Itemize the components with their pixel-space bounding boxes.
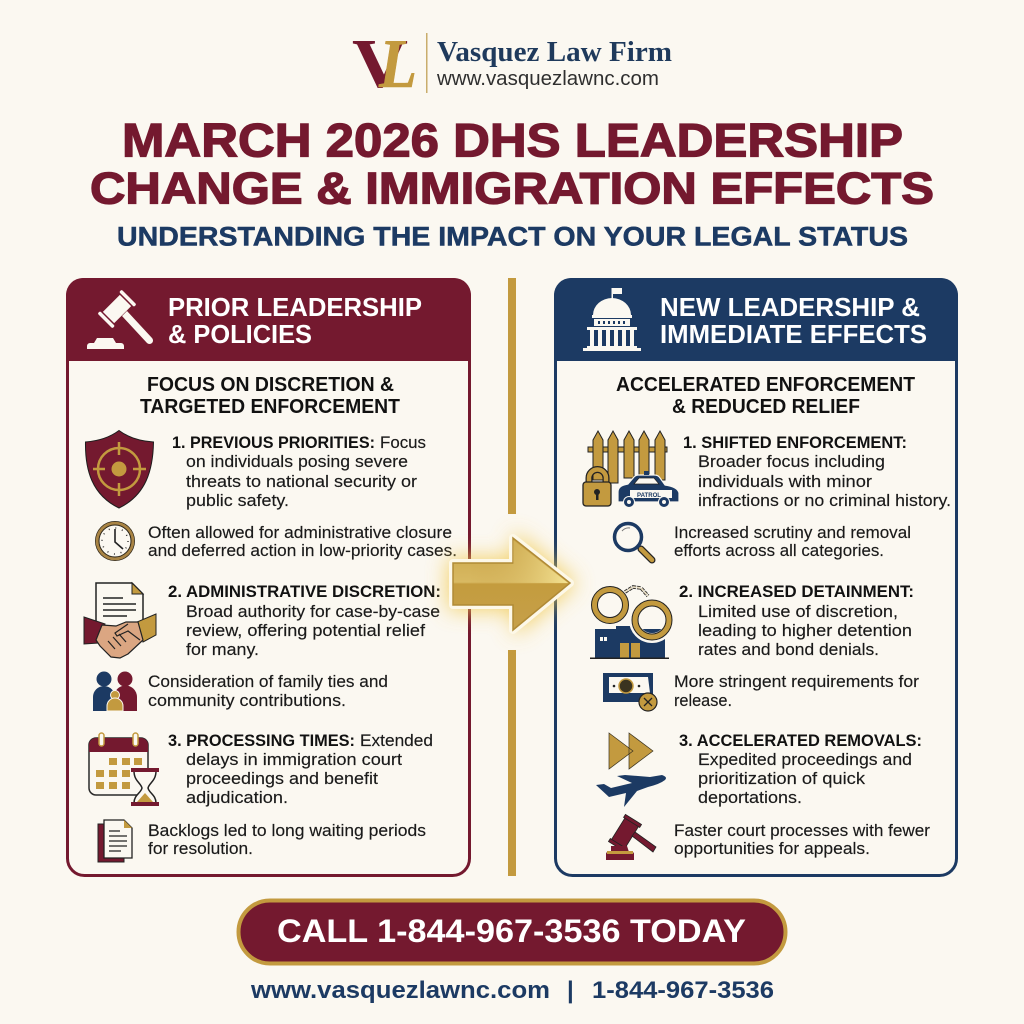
- text: shifted enforcement: Broader focus including: [698, 452, 885, 471]
- text: processing times: Extended: [360, 731, 433, 750]
- text: appeals note: Faster court processes with fewer: [674, 821, 930, 840]
- icon: VL monogram: V: [352, 26, 408, 103]
- text: administrative discretion: Broad authority for case-by-case: [186, 602, 440, 621]
- text: increased detainment: 2. INCREASED DETAINMENT:: [679, 582, 914, 601]
- text: accelerated removals: Expedited proceedings and: [698, 750, 912, 769]
- text: processing times: proceedings and benefit: [186, 769, 378, 788]
- text: scrutiny note: [674, 523, 911, 560]
- firm name: Vasquez Law Firm: [437, 37, 672, 68]
- panel heading: FOCUS ON DISCRETION &: [147, 374, 394, 396]
- header text: IMMEDIATE EFFECTS: [660, 319, 927, 349]
- header text: & POLICIES: [168, 319, 312, 349]
- text: release note: More stringent requirements for: [674, 672, 919, 691]
- panel: prior leadership and policies: [66, 278, 471, 876]
- arrow: gold arrow from prior to new leadership: [448, 531, 577, 637]
- center divider: [508, 278, 516, 876]
- footer contact line: www.vasquezlawnc.com: [250, 977, 550, 1004]
- panel header: prior leadership: [66, 278, 471, 361]
- text: previous priorities: [172, 433, 426, 510]
- text: scrutiny note: efforts across all categories.: [674, 541, 884, 560]
- text: family ties note: community contributions.: [148, 691, 346, 710]
- text: release note: [674, 672, 919, 710]
- icon: document and handshake: [84, 583, 156, 658]
- icon: fence, lock and patrol car: PATROL: [637, 493, 661, 499]
- text: increased detainment: [679, 582, 914, 659]
- call to action button: [238, 900, 786, 964]
- text: increased detainment: leading to higher detention: [698, 621, 912, 640]
- title: CHANGE & IMMIGRATION EFFECTS: [90, 164, 934, 214]
- subtitle: UNDERSTANDING THE IMPACT ON YOUR LEGAL STATUS: [117, 222, 908, 252]
- text: administrative closure note: and deferred action in low-priority cases.: [148, 541, 457, 560]
- text: administrative closure note: Often allowed for administrative closure: [148, 523, 452, 542]
- header text: [660, 292, 927, 349]
- icon: family: [93, 672, 137, 711]
- footer contact line: [250, 977, 774, 1004]
- icon: white gavel: [87, 290, 153, 349]
- text: processing times: adjudication.: [186, 788, 288, 807]
- icon: shield with target: [85, 430, 154, 508]
- text: processing times: 3. PROCESSING TIMES:: [168, 731, 355, 750]
- icon: white capitol building: [583, 288, 641, 351]
- text: release note: release.: [674, 691, 732, 710]
- icon: documents: [98, 820, 132, 862]
- icon: calendar and hourglass: [89, 733, 159, 806]
- icon: fast-forward and airplane: [596, 733, 666, 807]
- text: increased detainment: Limited use of discretion,: [698, 602, 898, 621]
- text: backlogs note: Backlogs led to long waiting periods: [148, 821, 426, 840]
- text: processing times: delays in immigration court: [186, 750, 402, 769]
- logo: Vasquez Law Firm: [352, 26, 672, 103]
- icon: handcuffs and detention building: [590, 587, 670, 659]
- text: previous priorities: Focus: [380, 433, 426, 452]
- text: shifted enforcement: [683, 433, 951, 510]
- text: appeals note: [674, 821, 930, 858]
- header text: [168, 292, 422, 349]
- text: appeals note: opportunities for appeals.: [674, 839, 870, 858]
- footer contact line: 1-844-967-3536: [592, 977, 774, 1004]
- panel heading: TARGETED ENFORCEMENT: [140, 396, 400, 418]
- header text: NEW LEADERSHIP &: [660, 292, 920, 322]
- panel: new leadership and immediate effects: [554, 278, 958, 876]
- text: shifted enforcement: 1. SHIFTED ENFORCEMENT:: [683, 433, 907, 452]
- panel heading: & REDUCED RELIEF: [672, 396, 860, 418]
- text: accelerated removals: [679, 731, 922, 807]
- text: increased detainment: rates and bond denials.: [698, 640, 879, 659]
- text: accelerated removals: 3. ACCELERATED REMOVALS:: [679, 731, 922, 750]
- title: [90, 114, 934, 214]
- icon: maroon gavel: [606, 814, 656, 860]
- text: backlogs note: for resolution.: [148, 839, 253, 858]
- firm website: www.vasquezlawnc.com: [436, 68, 659, 90]
- text: previous priorities: on individuals posing severe: [186, 452, 408, 471]
- footer contact line: |: [567, 977, 574, 1004]
- panel heading: ACCELERATED ENFORCEMENT: [616, 374, 915, 396]
- icon: clock: [95, 521, 135, 561]
- text: administrative discretion: 2. ADMINISTRATIVE DISCRETION:: [168, 582, 441, 601]
- text: administrative discretion: [168, 582, 441, 659]
- text: previous priorities: 1. PREVIOUS PRIORITIES:: [172, 433, 375, 452]
- text: processing times: [168, 731, 433, 807]
- text: accelerated removals: prioritization of quick: [698, 769, 866, 788]
- text: administrative discretion: review, offering potential relief: [186, 621, 425, 640]
- call to action button: CALL 1-844-967-3536 TODAY: [277, 913, 746, 949]
- icon: magnifying glass: [614, 524, 652, 560]
- panel heading: [140, 374, 400, 418]
- panel heading: [616, 374, 915, 418]
- text: administrative discretion: for many.: [186, 640, 259, 659]
- icon: bail money with X: [603, 673, 657, 711]
- icon: VL monogram: L: [378, 26, 417, 103]
- icon: fence, lock and patrol car: [583, 431, 679, 508]
- header text: PRIOR LEADERSHIP: [168, 292, 422, 322]
- text: previous priorities: public safety.: [186, 491, 289, 510]
- text: previous priorities: threats to national security or: [186, 472, 417, 491]
- text: scrutiny note: Increased scrutiny and removal: [674, 523, 911, 542]
- text: accelerated removals: deportations.: [698, 788, 802, 807]
- text: shifted enforcement: individuals with minor: [698, 472, 872, 491]
- text: family ties note: Consideration of family ties and: [148, 672, 388, 691]
- panel header: new leadership: [554, 278, 958, 361]
- text: family ties note: [148, 672, 388, 710]
- text: administrative closure note: [148, 523, 457, 560]
- text: shifted enforcement: infractions or no criminal history.: [698, 491, 951, 510]
- title: MARCH 2026 DHS LEADERSHIP: [122, 114, 903, 166]
- text: backlogs note: [148, 821, 426, 858]
